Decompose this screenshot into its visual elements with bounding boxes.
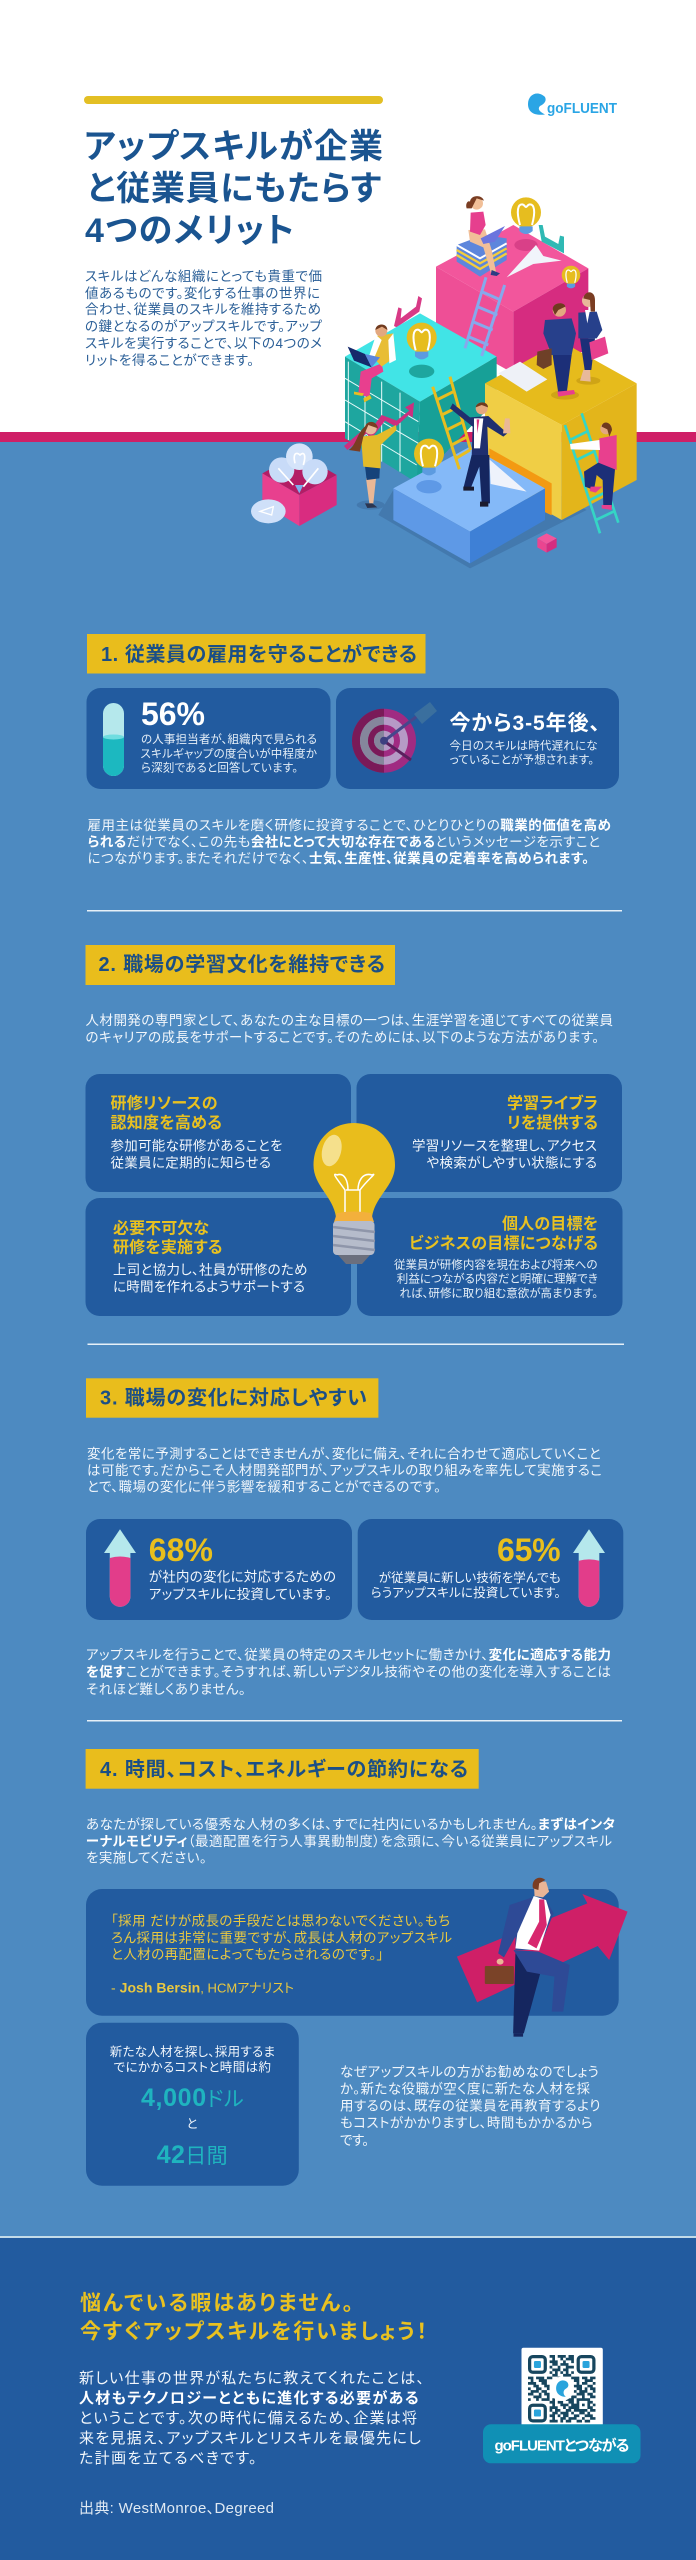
panel: quote: - Josh Bersin, HCMアナリスト: [111, 1980, 294, 1996]
section 4 heading: [86, 1749, 479, 1789]
blue ladder: [465, 277, 505, 356]
icon: thermometer gauge: [103, 703, 124, 776]
logo: goFLUENT: goFLUENT: [547, 100, 617, 117]
panel: personal goals: 従業員が研修内容を現在および将来への: [394, 1258, 598, 1272]
panel: quote: 「採用 だけが成長の手段だとは思わないでください。もち: [111, 1913, 450, 1928]
title: 4つのメリット: [85, 212, 294, 250]
why upskilling paragraph: か。新たな役職が空く度に新たな人材を採: [340, 2082, 590, 2097]
section 3 heading: 3. 職場の変化に対応しやすい: [100, 1387, 367, 1410]
white header background: [0, 0, 696, 432]
panel: learning library: リを提供する: [507, 1114, 598, 1132]
section 4 paragraph: あなたが探している優秀な人材の多くは、すでに社内にいるかもしれません。まずはインタ: [86, 1816, 615, 1832]
panel: essential training: 必要不可欠な: [113, 1218, 209, 1237]
small cube: [537, 533, 557, 553]
QR code: [522, 2348, 603, 2432]
source: 出典: WestMonroe、Degreed: [79, 2500, 274, 2517]
books: [457, 235, 507, 277]
panel: cost and time: と: [186, 2117, 198, 2131]
panel: 56% stat: ら深刻であると回答しています。: [141, 760, 298, 774]
panel: personal goals: [357, 1198, 622, 1316]
why upskilling paragraph: です。: [340, 2133, 369, 2148]
call to action text: 人材もテクノロジーとともに進化する必要がある: [79, 2389, 419, 2407]
section 3 closing paragraph: アップスキルを行うことで、従業員の特定のスキルセットに働きかけ、変化に適応する能力: [86, 1646, 611, 1662]
bulb box: [251, 443, 337, 526]
panel: 65% stat: 65%: [497, 1532, 561, 1568]
call to action text: 来を見据え、アップスキルとリスキルを最優先にし: [79, 2430, 421, 2447]
intro text: [85, 269, 323, 368]
panel: learning library: や検索がしやすい状態にする: [426, 1156, 597, 1171]
panel: 56% stat: の人事担当者が、組織内で見られる: [141, 732, 317, 746]
pink band: [0, 432, 696, 442]
title: [84, 127, 383, 250]
panel: cost and time: 新たな人材を探し、採用するま: [110, 2045, 275, 2059]
panel: 65% stat: らうアップスキルに投資しています。: [371, 1585, 561, 1600]
paper plane top: [507, 245, 562, 277]
icon: up arrow: [573, 1529, 605, 1607]
panel: personal goals: れば、研修に取り組む意欲が高まります。: [400, 1286, 598, 1300]
panel: raise awareness: 参加可能な研修があることを: [110, 1139, 282, 1154]
panel: personal goals: ビジネスの目標につなげる: [409, 1233, 598, 1252]
icon: target with arrow: [352, 702, 437, 773]
panel: 56% stat: スキルギャップの度合いが中程度か: [140, 746, 318, 760]
call to action heading: 悩んでいる暇はありません。: [80, 2292, 353, 2315]
call to action heading: 今すぐアップスキルを行いましょう！: [80, 2320, 427, 2344]
icon: central light bulb: [314, 1123, 395, 1264]
button: connect with goFLUENT: [483, 2424, 640, 2463]
section 1 heading: [87, 634, 426, 674]
yellow ladder: [433, 377, 471, 469]
intro text: リットを得ることができます。: [85, 352, 254, 368]
why upskilling paragraph: もコストがかかりますし、時間もかかるから: [340, 2116, 593, 2131]
small teal bracket: [539, 225, 564, 253]
panel: 68% stat: 68%: [149, 1532, 213, 1568]
panel: personal goals: 利益につながる内容だと明確に理解でき: [397, 1272, 598, 1286]
section 1 paragraph: につながります。またそれだけでなく、士気、生産性、従業員の定着率を高められます。: [88, 850, 589, 866]
panel: 56% stat: [86, 688, 330, 789]
section 3 closing paragraph: [86, 1646, 611, 1697]
panel: 68% stat: が社内の変化に対応するための: [149, 1570, 336, 1584]
panel: 3-5 years: っていることが予想されます。: [449, 752, 594, 766]
section 2 paragraph: 人材開発の専門家として、あなたの主な目標の一つは、生涯学習を通じてすべての従業員: [86, 1013, 613, 1028]
illustration: businessman carrying arrow: [457, 1878, 628, 2037]
ground shadows: [378, 487, 587, 568]
intro text: 値あるものです。変化する仕事の世界に: [85, 286, 320, 301]
title: アップスキルが企業: [84, 127, 383, 166]
why upskilling paragraph: なぜアップスキルの方がお勧めなのでしょう: [340, 2065, 599, 2080]
panel: 3-5 years: 今日のスキルは時代遅れにな: [450, 738, 598, 752]
call to action text: た計画を立てるべきです。: [79, 2450, 256, 2467]
intro text: の鍵となるのがアップスキルです。アップ: [85, 319, 323, 334]
section 3 paragraph: 変化を常に予測することはできませんが、変化に備え、それに合わせて適応していくこと: [87, 1446, 601, 1461]
why upskilling paragraph: 用するのは、既存の従業員を再教育するより: [340, 2099, 600, 2114]
logo: goFLUENT: [528, 93, 617, 117]
section 3 paragraph: とで、職場の変化に伴う影響を緩和することができるのです。: [87, 1480, 441, 1495]
icon: up arrow: [104, 1529, 136, 1607]
pink block: [436, 225, 588, 373]
blue block: [393, 447, 545, 563]
blue page background: [0, 442, 696, 2238]
laptop man: [348, 324, 396, 402]
open book: [498, 362, 547, 392]
panel: raise awareness: [86, 1074, 351, 1192]
section 3 paragraph: [87, 1446, 602, 1495]
panel: raise awareness: 認知度を高める: [110, 1113, 222, 1132]
panel: essential training: に時間を作れるようサポートする: [113, 1280, 305, 1295]
businessman and woman: [537, 292, 608, 400]
panel: 68% stat: アップスキルに投資しています。: [149, 1587, 332, 1602]
panel: raise awareness: 研修リソースの: [110, 1094, 218, 1112]
panel: cost and time: 4,000ドル: [141, 2084, 244, 2112]
magenta bracket: [394, 296, 422, 327]
panel: cost and time: [86, 2023, 299, 2186]
panel: essential training: [86, 1198, 351, 1316]
footer panel: [0, 2236, 696, 2560]
section 3 paragraph: は可能です。だからこそ人材開発部門が、アップスキルの取り組みを率先して実施するこ: [87, 1463, 602, 1478]
call to action text: 新しい仕事の世界が私たちに教えてくれたことは、: [79, 2370, 424, 2387]
woman with rising arrow: [344, 402, 414, 510]
section 3 closing paragraph: それほど難しくありません。: [86, 1682, 246, 1697]
section 1 paragraph: られるだけでなく、この先も会社にとって大切な存在であるというメッセージを示すこと: [88, 834, 600, 850]
section 2 paragraph: [86, 1013, 613, 1045]
panel: cost and time: でにかかるコストと時間は約: [113, 2060, 271, 2075]
section 3 heading: [86, 1378, 378, 1418]
header accent bar: [84, 96, 383, 104]
panel: 65% stat: [358, 1519, 623, 1620]
panel: quote: ろん採用は非常に重要ですが、成長は人材のアップスキル: [111, 1930, 452, 1945]
section 2 heading: [86, 945, 395, 985]
section 4 heading: 4. 時間、コスト、エネルギーの節約になる: [100, 1758, 468, 1781]
call to action text: ということです。次の時代に備えるため、企業は将: [79, 2410, 417, 2427]
panel: learning library: [356, 1074, 622, 1192]
panel: essential training: 研修を実施する: [113, 1238, 222, 1256]
paper plane bottom: [489, 459, 527, 492]
panel: cost and time: 42日間: [157, 2141, 228, 2169]
climbing man: [570, 423, 617, 510]
panel: 65% stat: が従業員に新しい技術を学んでも: [379, 1570, 561, 1585]
button: connect with goFLUENT: goFLUENTとつながる: [494, 2436, 629, 2454]
panel: learning library: 学習ライブラ: [507, 1094, 598, 1112]
section 4 paragraph: [86, 1816, 615, 1866]
call to action heading: [80, 2292, 427, 2344]
panel: quote: [86, 1889, 619, 2016]
section 2 paragraph: のキャリアの成長をサポートすることです。そのためには、以下のような方法があります。: [86, 1030, 599, 1045]
intro text: スキルはどんな組織にとっても貴重で価: [85, 269, 322, 284]
panel: 68% stat: [86, 1519, 352, 1620]
illustration: isometric blocks with people: [251, 196, 637, 568]
why upskilling paragraph: [340, 2065, 600, 2148]
panel: learning library: 学習リソースを整理し、アクセス: [412, 1139, 597, 1154]
title: と従業員にもたらす: [87, 170, 381, 208]
call to action text: [79, 2370, 424, 2467]
sitting woman with laptop: [466, 196, 505, 276]
panel: quote: と人材の再配置によってもたらされるのです。」: [111, 1947, 383, 1962]
section 2 heading: 2. 職場の学習文化を維持できる: [98, 953, 385, 976]
section 1 heading: 1. 従業員の雇用を守ることができる: [101, 642, 417, 666]
intro text: スキルを実行することで、以下の4つのメ: [85, 336, 322, 351]
section 1 paragraph: 雇用主は従業員のスキルを磨く研修に投資することで、ひとりひとりの職業的価値を高め: [88, 817, 611, 833]
teal ladder: [565, 413, 618, 533]
presenting man: [450, 402, 510, 507]
section 1 paragraph: [88, 817, 611, 866]
yellow block: [485, 342, 637, 520]
teal block: [345, 313, 497, 483]
yellow bulbs: [514, 239, 538, 251]
panel: essential training: 上司と協力し、社員が研修のため: [113, 1262, 308, 1277]
panel: 3-5 years: [336, 688, 619, 789]
panel: 3-5 years: 今から3-5年後、: [450, 712, 600, 735]
panel: personal goals: 個人の目標を: [502, 1214, 598, 1233]
panel: 56% stat: 56%: [141, 696, 205, 732]
intro text: 合わせ、従業員のスキルを維持するため: [85, 302, 321, 317]
section 4 paragraph: を実施してください。: [86, 1851, 207, 1866]
section 4 paragraph: ーナルモビリティ（最適配置を行う人事異動制度）を念頭に、今いる従業員にアップスキル: [86, 1833, 612, 1849]
section 3 closing paragraph: を促すことができます。そうすれば、新しいデジタル技術やその他の変化を導入することは: [86, 1664, 611, 1680]
panel: raise awareness: 従業員に定期的に知らせる: [110, 1155, 271, 1171]
